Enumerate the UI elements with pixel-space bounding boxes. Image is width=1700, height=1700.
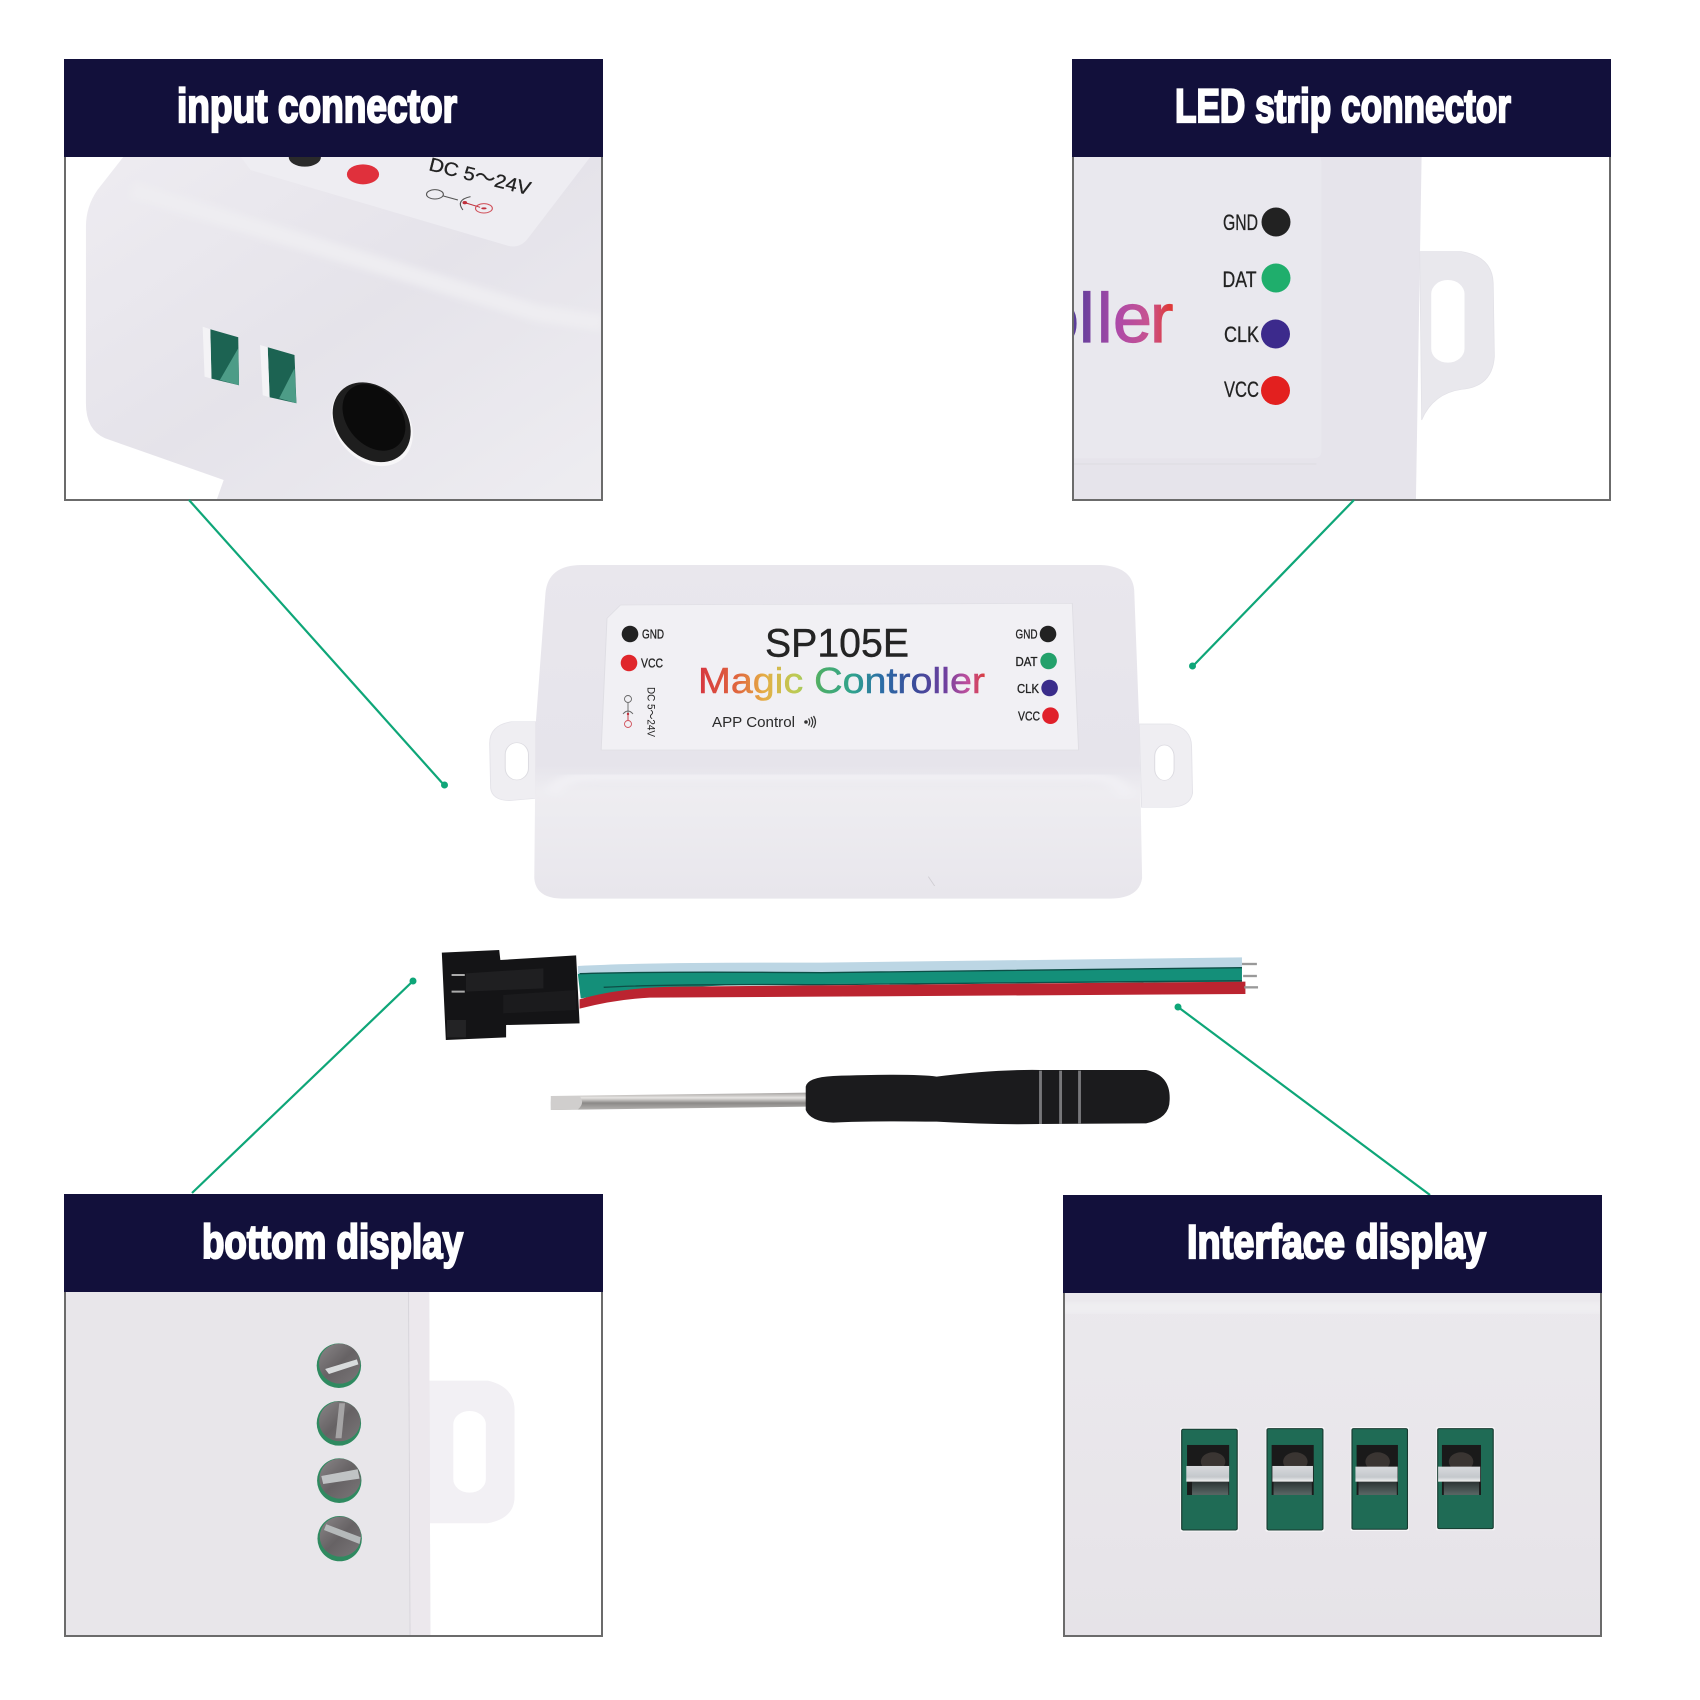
label text: DC 5~24V: DC 5～24V — [427, 154, 533, 200]
heading: bottom display — [64, 1194, 603, 1292]
pin legend: GND DAT CLK VCC: DAT — [1222, 267, 1256, 292]
frame — [1073, 157, 1610, 500]
text: APP Control: APP Control — [712, 715, 795, 731]
heading: LED strip connector: LED strip connector — [1175, 79, 1511, 132]
plug housing — [442, 950, 580, 1040]
photo: four terminal blocks — [1060, 1290, 1603, 1638]
photo: label side of the controller — [1040, 153, 1494, 502]
heading: LED strip connector — [1072, 59, 1611, 157]
controller body — [490, 565, 1193, 899]
panel: bottom display — [63, 1194, 603, 1637]
frame — [65, 1292, 602, 1636]
photo: input side of the controller — [86, 148, 603, 502]
right pins: GND DAT CLK VCC: VCC — [1018, 710, 1040, 724]
right pins: GND DAT CLK VCC: CLK — [1017, 682, 1040, 696]
icon: round power socket — [332, 382, 413, 466]
terminal 3 — [1350, 1427, 1409, 1531]
heading: Interface display: Interface display — [1187, 1215, 1486, 1268]
heading: bottom display: bottom display — [202, 1215, 463, 1268]
text: partial Magic Controller wordmark: oller — [1040, 279, 1173, 357]
heading: Interface display — [1063, 1195, 1602, 1293]
right pins: GND DAT CLK VCC: DAT — [1016, 655, 1038, 669]
leader line: bottom display to connector — [192, 978, 416, 1193]
heading: input connector: input connector — [177, 79, 457, 132]
pin legend: GND DAT CLK VCC: CLK — [1224, 322, 1259, 347]
terminal 1 — [1180, 1428, 1239, 1532]
product: SP105E controller — [490, 565, 1193, 899]
pin legend: GND DAT CLK VCC: GND — [1223, 210, 1258, 235]
left pins: GND VCC: VCC — [641, 656, 663, 670]
leader line: LED strip connector to device — [1189, 500, 1354, 670]
panel: input connector — [64, 59, 603, 502]
panel: Interface display — [1060, 1195, 1603, 1638]
pin legend: GND DAT CLK VCC — [1222, 208, 1290, 405]
power rating: DC 5~24V: DC 5～24V — [644, 687, 656, 738]
photo: underside with screws — [63, 1290, 515, 1637]
left pins: GND VCC: GND — [642, 628, 664, 642]
wires — [578, 957, 1258, 1009]
screw 1 — [317, 1343, 361, 1388]
screw 4 — [317, 1516, 362, 1561]
accessory: screwdriver — [551, 1070, 1170, 1124]
left pins: GND VCC — [621, 626, 664, 671]
frame — [1064, 1293, 1601, 1636]
panel: LED strip connector — [1040, 59, 1611, 502]
accessory: connector cable — [442, 950, 1258, 1040]
screw 3 — [317, 1458, 361, 1503]
screw 2 — [317, 1401, 361, 1446]
terminal 2 — [1266, 1427, 1324, 1532]
icon: wireless signal — [805, 716, 816, 728]
terminal 4 — [1436, 1427, 1495, 1530]
pin legend: GND DAT CLK VCC: VCC — [1224, 377, 1259, 402]
heading: input connector — [64, 59, 603, 157]
right pins: GND DAT CLK VCC: GND — [1016, 628, 1038, 642]
leader line: input connector to device — [189, 500, 448, 788]
text: SP105E: SP105E — [765, 622, 909, 666]
leader line: interface display to wires — [1174, 1004, 1430, 1195]
text: Magic Controller: Magic Controller — [698, 660, 985, 701]
power rating: DC 5~24V — [623, 687, 656, 738]
right pins: GND DAT CLK VCC — [1016, 626, 1059, 724]
frame — [65, 157, 602, 500]
